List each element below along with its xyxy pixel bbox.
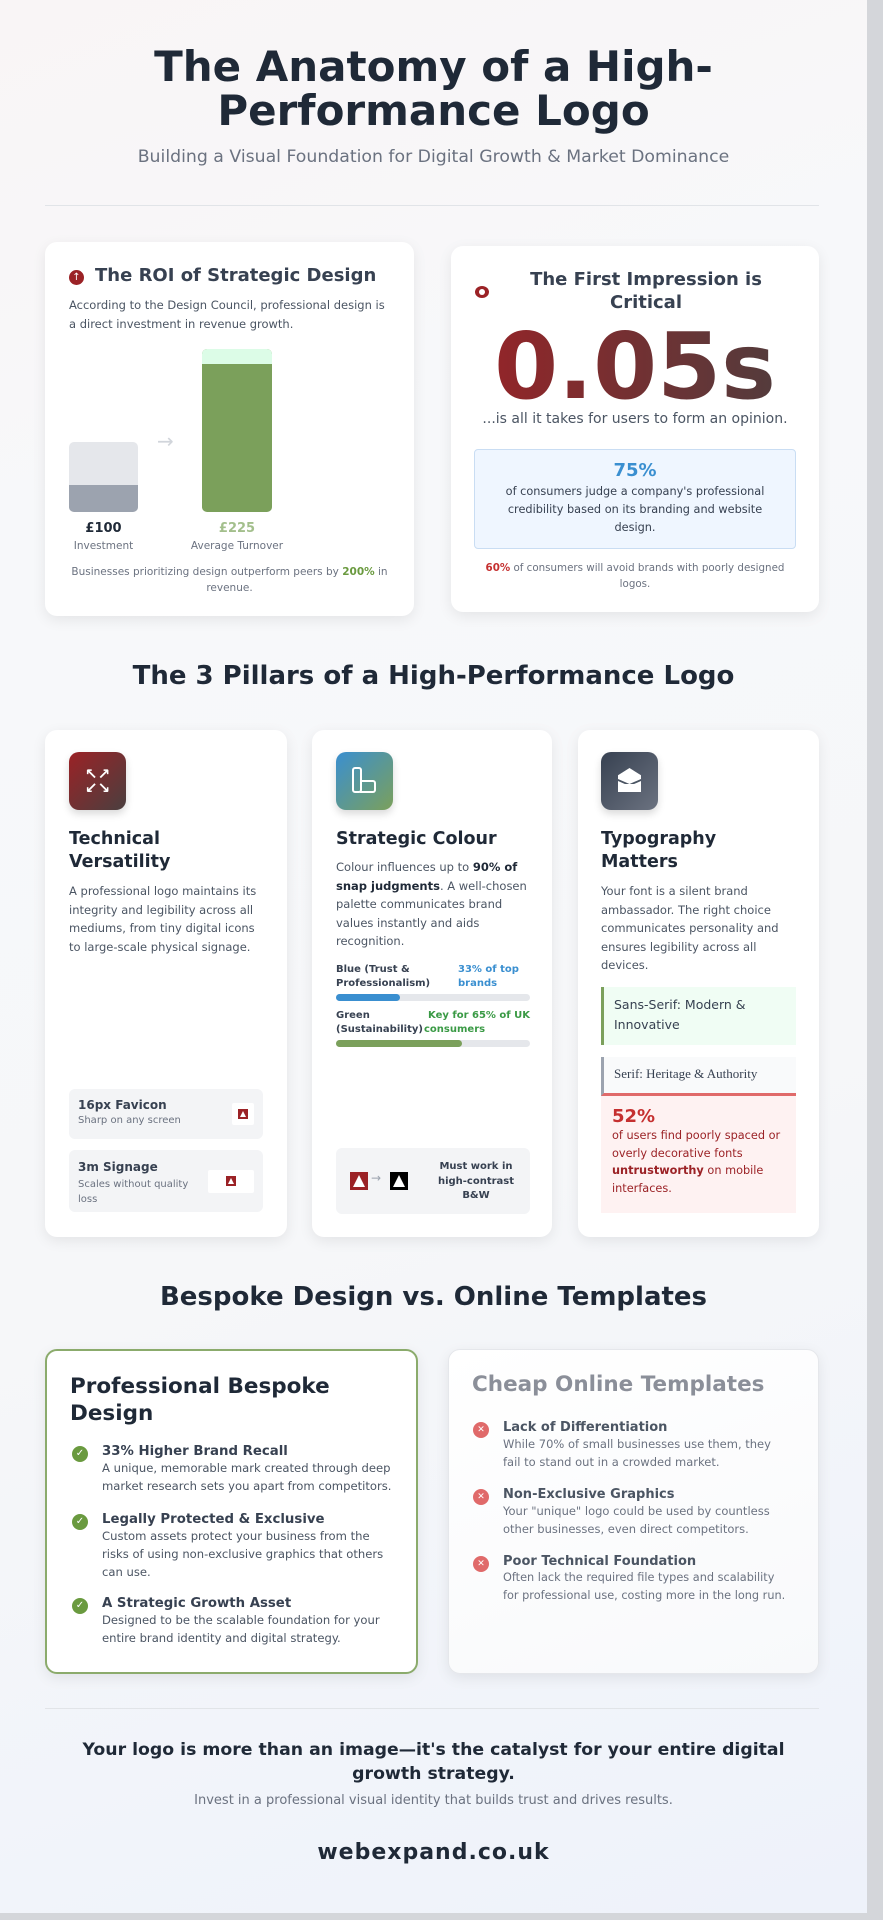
- subtitle: Building a Visual Foundation for Digital Growth & Market Dominance: [138, 147, 729, 167]
- list: benefits: A unique, memorable mark created through deep market research sets you apart from competitors.: [102, 1461, 392, 1493]
- title: Performance Logo: [217, 86, 650, 135]
- heading: Matters: [601, 852, 678, 872]
- sans-serif sample: [601, 987, 796, 1045]
- icon: expand: ↙↘: [85, 779, 110, 797]
- list: drawbacks: Often lack the required file types and scalability: [503, 1571, 774, 1584]
- list: drawbacks: [473, 1420, 785, 1602]
- bar: blue: Professionalism): [336, 978, 430, 989]
- B&W box: Must work in high-contrast B&W: [438, 1161, 514, 1201]
- bar chart: [69, 349, 284, 552]
- closing statement: Your logo is more than an image—it's the catalyst for your entire digital growth strategy.: [82, 1740, 785, 1784]
- signage box: Scales without quality loss: [78, 1179, 188, 1205]
- text: Your font is a silent brand ambassador. The right choice communicates personality and ensures legibility across all devices.: [601, 884, 779, 972]
- icon: swatch: [336, 752, 393, 810]
- heading: Typography: [601, 829, 716, 849]
- list: benefits: ✓: [76, 1516, 84, 1527]
- bar chart: £100: [85, 521, 122, 536]
- heading: [69, 829, 170, 872]
- heading: Design: [70, 1401, 153, 1426]
- list: benefits: Legally Protected & Exclusive: [102, 1512, 325, 1527]
- favicon box: [69, 1089, 263, 1139]
- icon: up arrow: [69, 270, 84, 285]
- closing subtext: Invest in a professional visual identity that builds trust and drives results.: [194, 1793, 673, 1808]
- B&W box: →: [371, 1171, 381, 1185]
- list: drawbacks: for professional use, costing more in the long run.: [503, 1589, 785, 1602]
- footnote: 200%: Businesses prioritizing design outperform peers by 200% in revenue.: [71, 566, 388, 594]
- serif sample: [601, 1057, 796, 1096]
- footnote: 60%: 60% of consumers will avoid brands with poorly designed logos.: [486, 562, 784, 590]
- callout: 75%: [474, 449, 796, 549]
- bar chart: Investment: [74, 540, 133, 552]
- bar: green: (Sustainability): [336, 1024, 423, 1035]
- heading: [70, 1374, 330, 1426]
- text: Colour influences up to 90% of snap judgments. A well-chosen palette communicates brand values instantly and aids recognition.: [336, 860, 527, 948]
- heading: [601, 829, 716, 872]
- bar: green: consumers: [424, 1024, 485, 1035]
- list: benefits: Custom assets protect your business from the risks of using non-exclusive graphics that others can use.: [102, 1529, 383, 1579]
- panel: technical versatility: [45, 730, 287, 1237]
- heading: Technical: [69, 829, 160, 849]
- heading: 3 pillars: The 3 Pillars of a High-Performance Logo: [133, 661, 734, 691]
- sans-serif sample: Sans-Serif: Modern & Innovative: [614, 997, 746, 1032]
- heading: Strategic Colour: [336, 829, 497, 849]
- bar: green: [336, 1010, 530, 1047]
- text: A professional logo maintains its integrity and legibility across all mediums, from tiny digital icons to large-scale physical signage.: [69, 884, 256, 954]
- heading: first impression: The First Impression is Critical: [530, 269, 762, 313]
- favicon box: 16px Favicon: [78, 1098, 167, 1112]
- bar: blue: [336, 964, 530, 1001]
- list: drawbacks: Your "unique" logo could be used by countless other businesses, even direct competitors.: [503, 1504, 770, 1536]
- bar: blue: brands: [458, 978, 497, 989]
- callout: 75%: 75%: [613, 460, 657, 481]
- list: drawbacks: ✕: [477, 1559, 485, 1569]
- footer: website: webexpand.co.uk: [317, 1840, 550, 1865]
- list: drawbacks: Poor Technical Foundation: [503, 1554, 696, 1569]
- text: ROI description: According to the Design Council, professional design is a direct investment in revenue growth.: [69, 298, 385, 330]
- signage box: [69, 1150, 263, 1212]
- bar chart: →: [157, 429, 174, 453]
- callout: 52%: of users find poorly spaced or overly decorative fonts untrustworthy on mobile interfaces.: [612, 1129, 780, 1194]
- heading: Cheap Online Templates: [472, 1372, 764, 1397]
- heading: Professional Bespoke: [70, 1374, 330, 1399]
- list: benefits: Designed to be the scalable foundation for your entire brand identity and digital strategy.: [102, 1613, 380, 1645]
- heading: ROI: The ROI of Strategic Design: [95, 265, 376, 286]
- panel: bespoke: [45, 1349, 418, 1674]
- bar: blue: Blue (Trust &: [336, 964, 410, 975]
- B&W box: [336, 1148, 530, 1214]
- list: drawbacks: ✕: [477, 1492, 485, 1502]
- list: benefits: [72, 1444, 392, 1645]
- icon: eye: [475, 286, 489, 298]
- big stat 0.05s: 0.05s: [494, 313, 776, 420]
- bar chart: Average Turnover: [191, 540, 283, 552]
- bar: green: Key for 65% of UK: [428, 1010, 530, 1021]
- list: benefits: 33% Higher Brand Recall: [102, 1444, 288, 1459]
- callout: 52%: [601, 1096, 796, 1213]
- panel: first impression: [451, 246, 819, 612]
- list: drawbacks: ✕: [477, 1425, 485, 1435]
- caption: ...is all it takes for users to form an opinion.: [482, 411, 788, 427]
- heading: Versatility: [69, 852, 170, 872]
- callout: 75%: of consumers judge a company's professional credibility based on its branding and website design.: [506, 485, 764, 534]
- list: benefits: ✓: [76, 1600, 84, 1611]
- list: benefits: ✓: [76, 1448, 84, 1459]
- signage box: 3m Signage: [78, 1160, 158, 1174]
- favicon box: Sharp on any screen: [78, 1115, 181, 1126]
- panel: templates: [448, 1349, 819, 1674]
- list: drawbacks: Non-Exclusive Graphics: [503, 1487, 674, 1502]
- heading: bespoke vs templates: Bespoke Design vs. Online Templates: [160, 1282, 707, 1312]
- icon: up arrow: ↑: [72, 272, 81, 283]
- icon: expand: ↖↗: [85, 765, 110, 783]
- list: drawbacks: While 70% of small businesses use them, they fail to stand out in a crowded market.: [503, 1437, 771, 1469]
- icon: cap: [601, 752, 658, 810]
- panel: typography: [578, 730, 819, 1237]
- title: [154, 42, 713, 135]
- icon: expand: [69, 752, 126, 810]
- title: The Anatomy of a High-: [154, 42, 713, 91]
- list: drawbacks: Lack of Differentiation: [503, 1420, 667, 1435]
- list: benefits: A Strategic Growth Asset: [102, 1596, 291, 1611]
- bar: blue: 33% of top: [458, 964, 519, 975]
- bar: green: Green: [336, 1010, 370, 1021]
- bar chart: £225: [219, 521, 255, 536]
- panel: strategic colour: [312, 730, 552, 1237]
- serif sample: Serif: Heritage & Authority: [614, 1066, 757, 1081]
- panel: ROI: [45, 242, 414, 616]
- callout: 52%: 52%: [612, 1106, 655, 1127]
